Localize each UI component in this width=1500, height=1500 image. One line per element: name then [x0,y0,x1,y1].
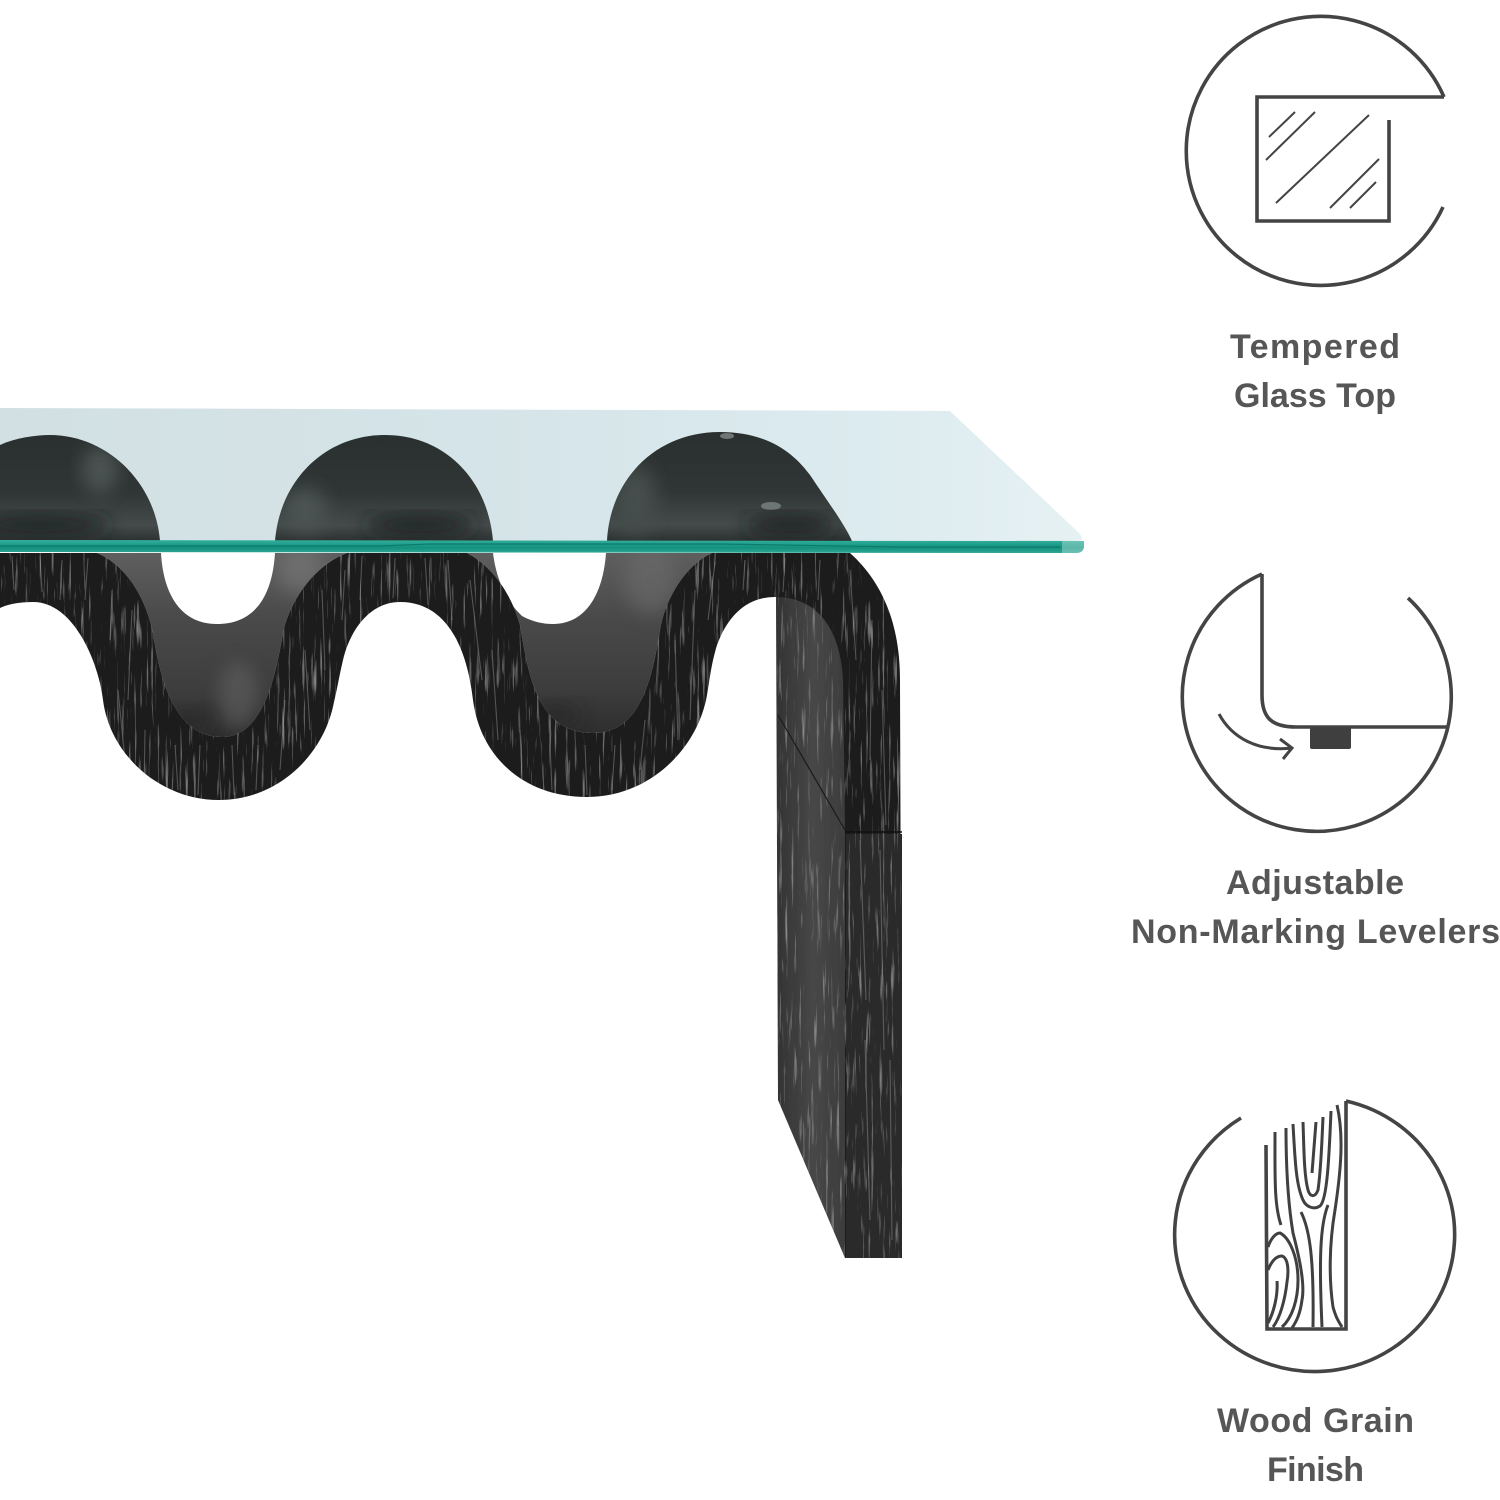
glass front edge [0,540,1084,553]
product photo: wave console table [0,408,1084,1258]
feature: wood grain finish [1175,1101,1455,1489]
label: tempered glass top: Tempered [1230,328,1400,366]
wave trough inner surfaces [97,553,712,737]
feature: tempered glass top [1186,16,1444,415]
glass top surface [0,408,1082,541]
leg inner side [776,597,850,1258]
label: wood grain finish: Finish [1267,1451,1364,1489]
label: tempered glass top [1230,328,1400,415]
label: wood grain finish [1217,1402,1414,1489]
leg joint [845,831,902,833]
icon: wood plank in circle [1175,1101,1455,1372]
arch shading [0,446,835,535]
icon: leveler foot in circle [1182,574,1451,831]
feature: adjustable levelers [1131,574,1500,951]
openings under trough [161,553,606,624]
label: adjustable non-marking levelers: Non-Marking Levelers [1131,913,1500,951]
label: wood grain finish: Wood Grain [1217,1402,1414,1440]
label: tempered glass top: Glass Top [1234,377,1396,415]
label: adjustable non-marking levelers: Adjustable [1226,864,1404,902]
wood wave front face and leg [0,553,902,1258]
label: adjustable non-marking levelers [1131,864,1500,951]
wave arches seen through glass [0,432,852,541]
wood grain streaks [12,556,892,1240]
lower leg front panel [846,834,902,1258]
icon: glass pane in circle [1186,16,1444,285]
trough highlights [168,546,676,732]
